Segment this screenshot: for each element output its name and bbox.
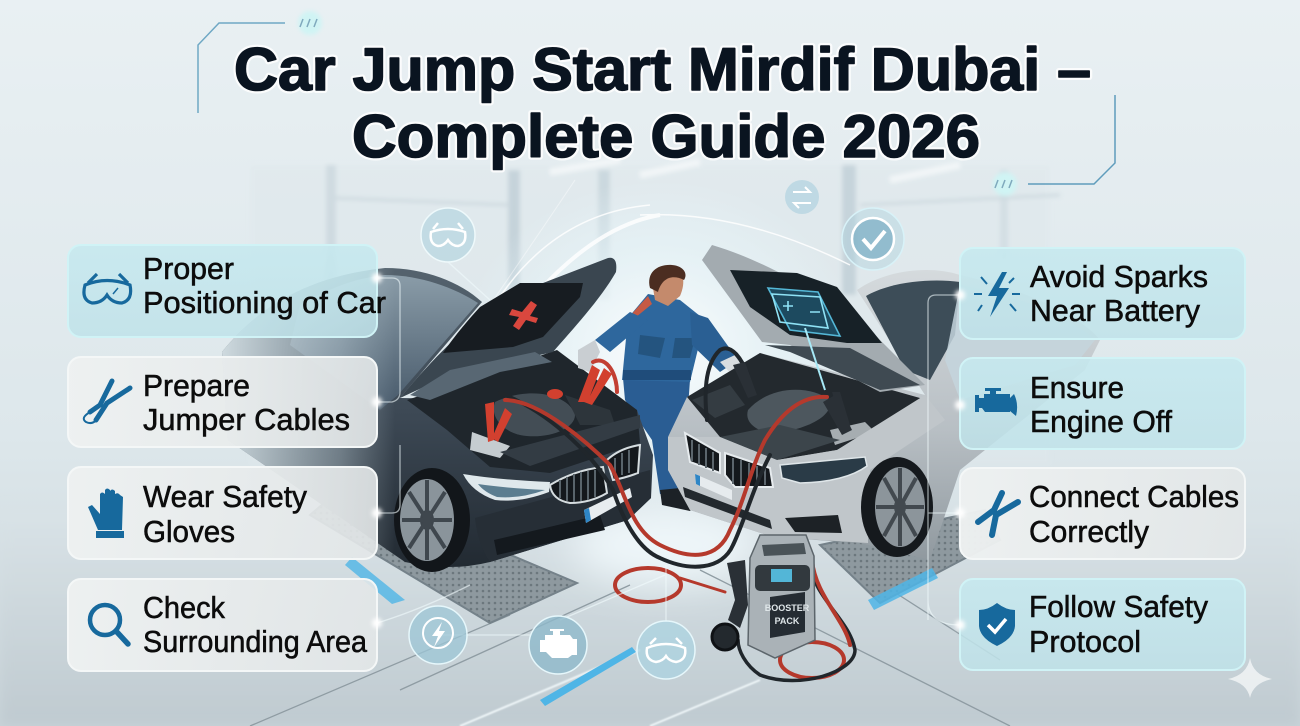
decorative bracket: bottom right [993,95,1115,196]
dark car body [222,268,653,567]
dark car [215,258,653,572]
mechanic legs [623,378,695,511]
dark car grille [550,445,640,503]
decorative bracket: top left [198,11,322,113]
dark car licence plate [584,488,632,523]
card: Wear Safety Gloves [68,467,377,559]
label: Prepare [143,368,250,403]
label: Proper [143,251,234,286]
card: Avoid Sparks Near Battery [960,248,1245,339]
dark car engine bay [407,350,640,473]
booster label: PACK [775,616,800,626]
dark car engine cover [494,393,575,436]
silver car grille [685,433,773,487]
sparkle: bottom right corner [1228,658,1272,698]
circle icon: goggles top [421,208,475,262]
label: Follow Safety [1029,589,1208,624]
black cable [500,393,770,567]
booster label panel [770,592,805,638]
label: Correctly [1029,514,1149,549]
dark car open hood [400,258,616,398]
silver car [668,245,1100,560]
silver car window [866,281,960,380]
black clamps [733,362,852,435]
mechanic upper body [578,265,745,382]
card: Prepare Jumper Cables [68,357,377,447]
floor with tile lines [0,505,1300,726]
icon: shield [979,603,1015,646]
silver car open hood [702,245,925,392]
blue floor light strips [345,557,938,706]
booster pack [712,535,855,681]
circle icon: check [842,208,904,270]
dark car rear fade [222,268,388,550]
booster label: BOOSTER [765,603,810,613]
booster cables [738,560,855,681]
red clamps [485,365,612,442]
jumper cables [500,348,827,602]
label: Gloves [143,514,235,549]
title [234,36,1091,170]
card: Follow Safety Protocol [960,579,1245,670]
connector lines [377,262,960,635]
title: Complete Guide 2026 [352,103,980,170]
mechanic head [652,266,683,306]
icon: spark [974,272,1020,317]
dark car front wheel [394,468,470,572]
silver car headlight [780,457,867,483]
dark car lower bumper [475,470,651,562]
mechanic torso [622,294,705,382]
booster control panel [755,565,810,591]
silver car bumper [668,395,945,543]
circle icon: engine [529,616,587,674]
dark car window [290,275,478,410]
icon: glove [88,488,124,538]
mechanic arms [595,312,648,352]
circle icon: arrows [785,180,819,214]
circle icon: lightning [409,606,467,664]
booster wheel [712,624,738,650]
glow dots on card edges [372,273,965,630]
title: Car Jump Start Mirdif Dubai – [234,36,1091,103]
red coil on floor [615,568,681,602]
circle icon: goggles bottom [637,621,695,679]
silver car engine bay [687,353,927,460]
card: Ensure Engine Off [960,358,1245,449]
label: Protocol [1029,624,1141,659]
label: Wear Safety [143,479,307,514]
dark car headlight [463,474,550,501]
lift pad: left car [310,485,577,623]
silver car licence plate [695,474,732,500]
icon: magnifier [90,605,128,644]
label: Surrounding Area [143,624,368,659]
mechanic boot [660,488,695,511]
icon: clamp [84,381,130,423]
label: Connect Cables [1029,479,1239,514]
card: Check Surrounding Area [68,579,377,671]
icon: engine [975,388,1017,416]
label: Check [143,590,225,625]
lift pad: right car [820,510,1000,603]
card: Proper Positioning of Car [68,245,386,337]
red x on hood [509,301,538,330]
label: Positioning of Car [143,285,386,320]
silver car body [668,270,1100,560]
hologram battery on hood [768,288,840,390]
icon: clamp [978,493,1018,535]
booster clamp [727,560,748,628]
silver car front wheel [861,457,933,557]
label: Avoid Sparks [1030,259,1208,294]
icon: goggles [84,274,131,303]
label: Ensure [1030,370,1124,405]
red cable [505,397,827,555]
mechanic gloves [578,340,600,372]
booster body [748,535,815,658]
label: Engine Off [1030,404,1172,439]
label: Jumper Cables [143,402,350,437]
title: Complete Guide 2026 [352,103,980,170]
silver car engine cover [747,390,830,432]
faint holographic arcs [480,180,850,330]
card: Connect Cables Correctly [960,468,1245,559]
label: Near Battery [1030,293,1200,328]
title: Car Jump Start Mirdif Dubai – [234,36,1091,103]
